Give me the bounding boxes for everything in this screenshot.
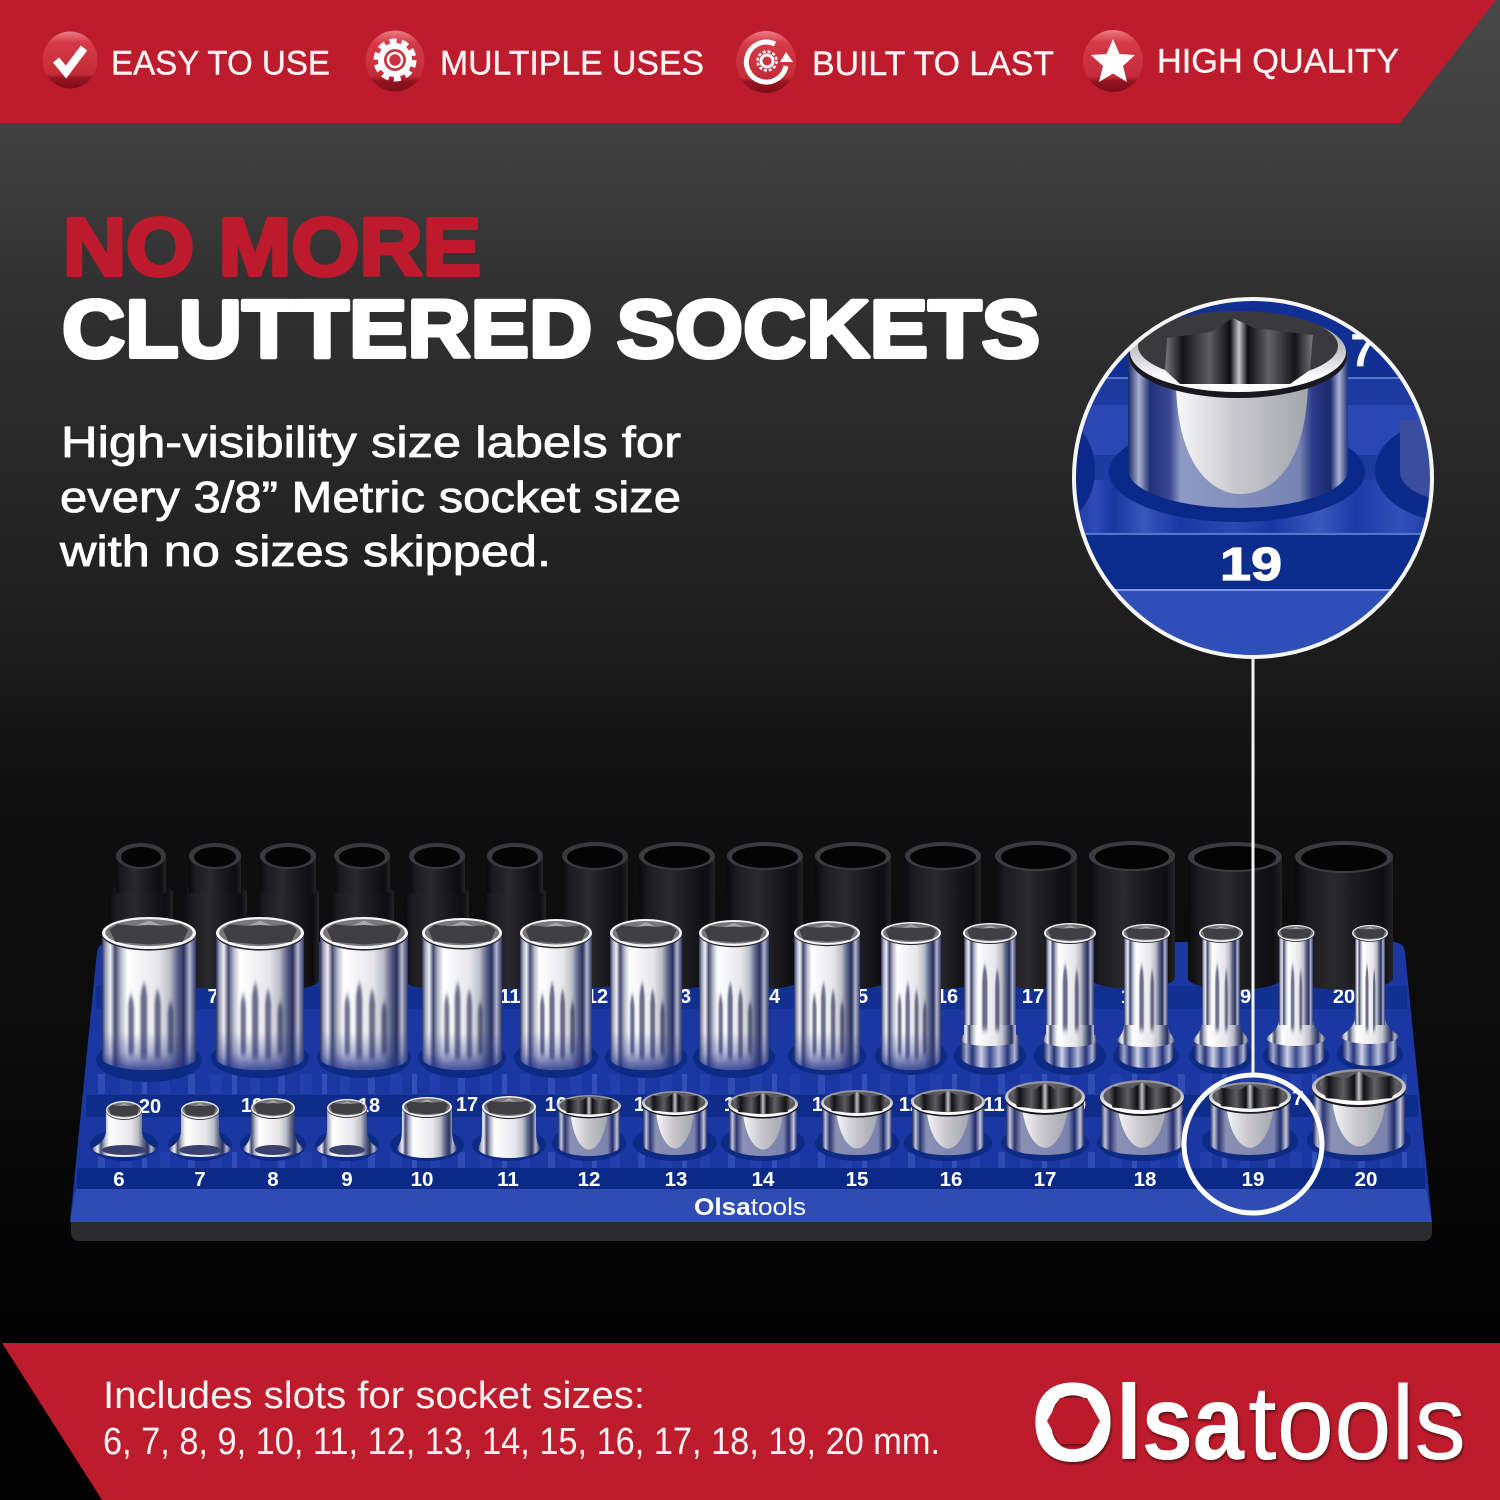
bottom row size labels: 16 xyxy=(940,1168,962,1191)
logo: O xyxy=(1031,1360,1115,1485)
slots text xyxy=(103,1375,940,1463)
middle row size labels: 18 xyxy=(358,1095,380,1117)
tall socket holes xyxy=(96,1037,1403,1082)
top row size labels: 9 xyxy=(356,986,368,1008)
middle row size labels: 10 xyxy=(1064,1094,1086,1116)
bottom row size labels: 15 xyxy=(846,1168,868,1191)
middle row size labels: 8 xyxy=(1219,1094,1231,1116)
bottom row size labels xyxy=(113,1168,1377,1191)
tray reflection under tall sockets xyxy=(88,1074,1414,1094)
top row size labels: 16 xyxy=(936,986,958,1008)
bottom row size labels: 14 xyxy=(752,1168,775,1191)
icon: star badge xyxy=(1083,30,1143,92)
title line 1: NO MORE xyxy=(63,202,481,293)
banner shape xyxy=(2,1343,1500,1500)
title xyxy=(62,202,1040,375)
bottom row size labels: 11 xyxy=(497,1168,519,1191)
middle row size labels xyxy=(139,1088,1304,1118)
top row size labels: 11 xyxy=(499,986,521,1008)
bottom label strip xyxy=(77,1168,1425,1189)
tray reflection under small sockets xyxy=(80,1152,1422,1168)
front face xyxy=(70,1189,1432,1222)
logo: lsa xyxy=(1116,1364,1245,1482)
title line 2: CLUTTERED SOCKETS xyxy=(62,284,1040,375)
slots text: 6, 7, 8, 9, 10, 11, 12, 13, 14, 15, 16, 17, 18, 19, 20 mm. xyxy=(103,1421,940,1463)
banner shape xyxy=(0,0,1496,123)
top row size labels: 6 xyxy=(135,986,147,1008)
top row size labels: 10 xyxy=(426,986,448,1008)
top row size labels: 17 xyxy=(1022,986,1044,1008)
description text: with no sizes skipped. xyxy=(59,528,551,576)
bottom row size labels: 9 xyxy=(341,1168,353,1191)
icon: check badge xyxy=(42,32,98,88)
logo xyxy=(1031,1360,1466,1485)
bottom row size labels: 17 xyxy=(1034,1168,1056,1191)
tray body xyxy=(70,942,1432,1222)
label: easy to use: EASY TO USE xyxy=(111,44,330,82)
bottom row size labels: 8 xyxy=(267,1168,279,1191)
bottom row size labels: 19 xyxy=(1242,1168,1264,1191)
middle row size labels: 15 xyxy=(634,1094,656,1116)
top row label strip xyxy=(96,986,1407,1009)
chrome small sockets bottom row xyxy=(92,1069,1406,1158)
top row size labels: 20 xyxy=(1333,986,1355,1008)
description text: every 3/8” Metric socket size xyxy=(60,474,681,522)
bottom row size labels: 6 xyxy=(113,1168,125,1191)
top row size labels: 12 xyxy=(586,986,608,1008)
callout small ring xyxy=(1184,1075,1322,1213)
top row size labels: 13 xyxy=(669,986,691,1008)
label: high quality: HIGH QUALITY xyxy=(1157,42,1399,80)
bottom row size labels: 20 xyxy=(1355,1168,1377,1191)
label: built to last: BUILT TO LAST xyxy=(812,45,1054,83)
middle row label strip xyxy=(86,1095,1418,1117)
magnified view contents: 7 xyxy=(1350,324,1376,376)
slots text: Includes slots for socket sizes: xyxy=(103,1375,645,1417)
tray logo: Olsatools xyxy=(694,1194,806,1221)
chrome tall sockets middle row xyxy=(102,917,1399,1070)
icon: cycle gear badge xyxy=(736,31,796,93)
middle row size labels: 12 xyxy=(899,1094,921,1116)
magnified view contents xyxy=(1076,301,1430,655)
top row size labels: 15 xyxy=(846,986,868,1008)
middle row size labels: 9 xyxy=(1144,1094,1156,1116)
middle row size labels: 19 xyxy=(241,1095,263,1117)
top banner xyxy=(0,0,1496,123)
magnified callout xyxy=(1072,297,1434,659)
bottom row size labels: 7 xyxy=(194,1168,206,1191)
bottom row size labels: 10 xyxy=(411,1168,433,1191)
small socket holes xyxy=(90,1119,1411,1161)
middle row size labels: 11 xyxy=(983,1094,1005,1116)
top row size labels: 14 xyxy=(758,986,781,1008)
logo: tools xyxy=(1248,1364,1466,1482)
middle row size labels: 7 xyxy=(1292,1088,1304,1110)
top row size labels: 8 xyxy=(282,986,294,1008)
middle row size labels: 16 xyxy=(545,1094,567,1116)
bottom row size labels: 18 xyxy=(1134,1168,1156,1191)
bottom row size labels: 12 xyxy=(578,1168,600,1191)
top row size labels: 19 xyxy=(1229,986,1251,1008)
bottom banner xyxy=(2,1343,1500,1500)
middle row size labels: 17 xyxy=(456,1094,478,1116)
middle row size labels: 13 xyxy=(812,1094,834,1116)
label: multiple uses: MULTIPLE USES xyxy=(440,44,704,82)
tray base xyxy=(71,1222,1432,1241)
black sockets back row xyxy=(109,841,1393,990)
magnified ring xyxy=(1074,299,1432,657)
description text xyxy=(59,419,681,576)
description text: High-visibility size labels for xyxy=(61,419,681,467)
magnified view contents: 19 xyxy=(1220,538,1282,590)
top row size labels: 18 xyxy=(1121,986,1143,1008)
middle row size labels: 14 xyxy=(724,1094,747,1116)
bottom row size labels: 13 xyxy=(665,1168,687,1191)
top row size labels: 7 xyxy=(207,986,219,1008)
top row size labels xyxy=(135,986,1355,1008)
callout connector line xyxy=(1252,656,1254,1076)
middle row size labels: 20 xyxy=(139,1096,161,1118)
icon: gear badge xyxy=(366,30,424,92)
socket organizer tray xyxy=(70,841,1432,1241)
